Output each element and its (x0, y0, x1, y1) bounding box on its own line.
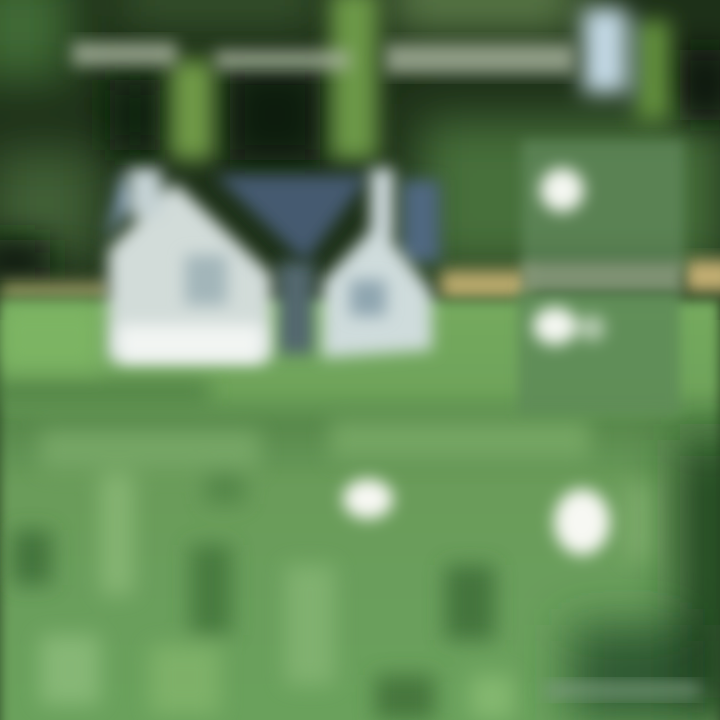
house (105, 168, 440, 363)
roof (105, 170, 440, 262)
translucent info panels (518, 140, 684, 414)
lawn (0, 300, 720, 720)
background: dark trees (0, 0, 720, 320)
horizon: sandy strip (0, 260, 720, 300)
white flowers (343, 479, 610, 555)
blurred title band (72, 42, 575, 74)
upper panel (522, 140, 684, 268)
middle strip of the panel (522, 262, 682, 294)
lower panel (518, 292, 680, 414)
right gable (322, 168, 432, 358)
left gable (108, 168, 272, 360)
house shadow and centre (278, 262, 314, 354)
blurred corner caption (545, 682, 700, 698)
windows and porch (118, 255, 386, 363)
panel icons (533, 168, 605, 345)
